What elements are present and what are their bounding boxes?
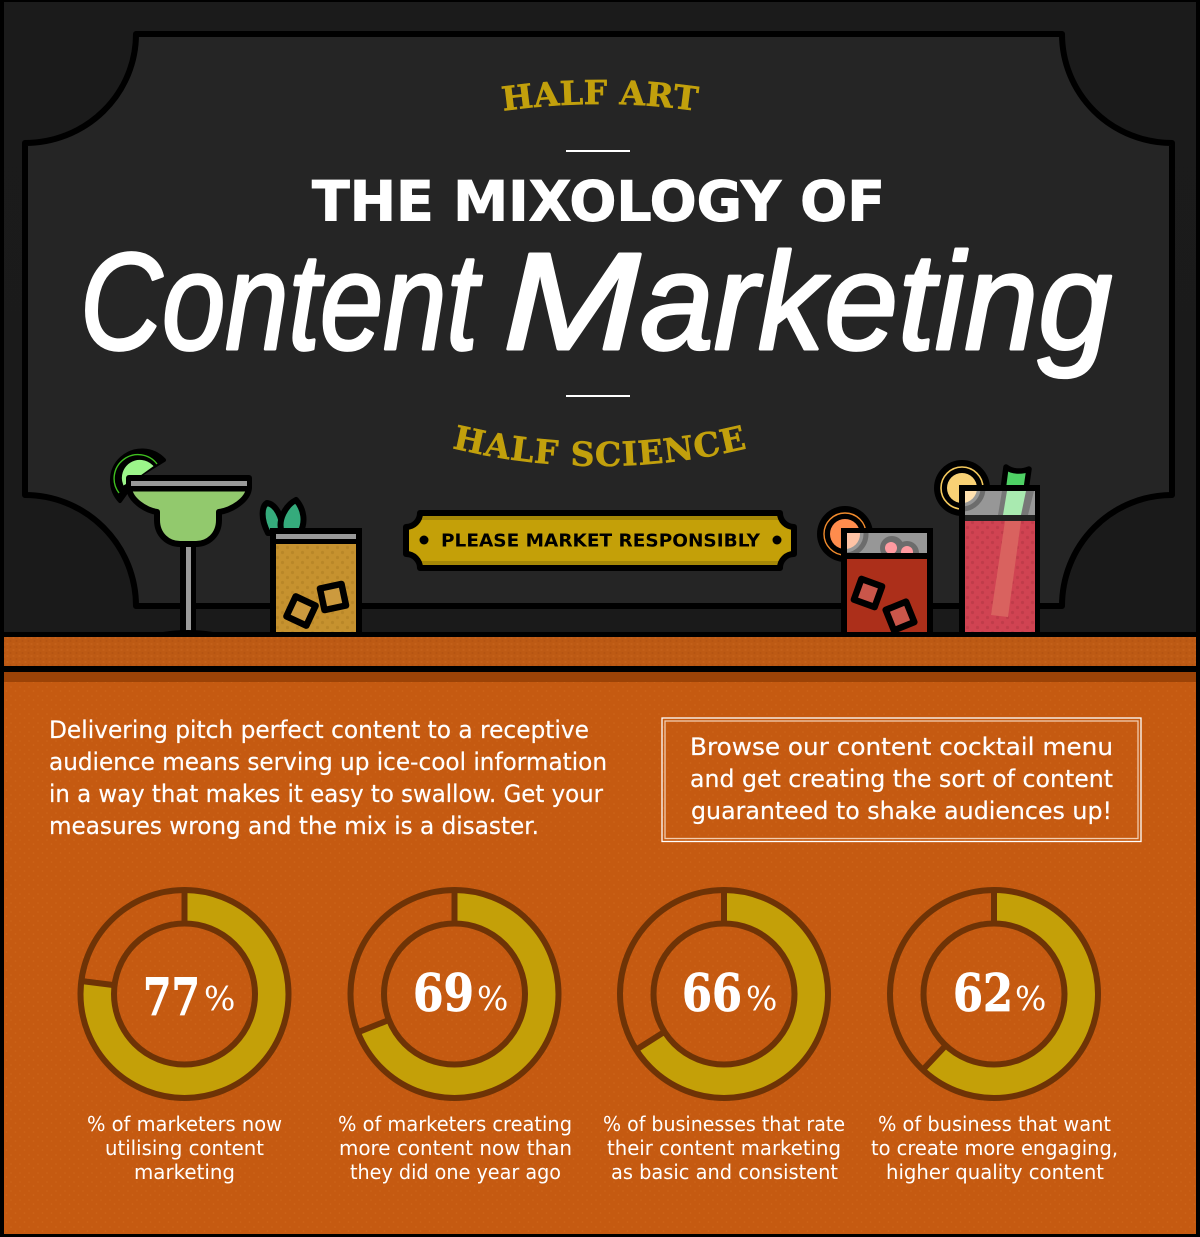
caption [603,1112,845,1184]
callout: cocktail menu: Browse our content cocktail menu [690,733,1113,761]
text block: intro: Delivering pitch perfect content to a receptive [49,716,589,744]
title: content marketing: M [503,225,640,379]
text block: intro: in a way that makes it easy to swallow. Get your [49,780,603,808]
value: 77 [143,968,200,1028]
caption: higher quality content [886,1160,1104,1184]
donut chart: 62% [890,890,1098,1098]
caption: % of marketers now [87,1112,282,1136]
title: content marketing: arketing [640,225,1112,379]
value: % [746,979,777,1018]
header background [4,2,1196,632]
caption: their content marketing [607,1136,841,1160]
callout: cocktail menu [662,718,1141,842]
title: content marketing [80,225,1112,379]
caption: utilising content [105,1136,264,1160]
icon: margarita glass [112,450,249,632]
value: % [204,979,235,1018]
ice cube [320,584,346,610]
plaque: please market responsibly [400,513,800,568]
value: % [1015,979,1046,1018]
caption: to create more engaging, [871,1136,1118,1160]
title: the mixology of: THE MIXOLOGY OF [312,170,885,234]
divider bottom [566,395,630,397]
donut chart: 77% [80,890,288,1098]
value: 66 [682,964,742,1024]
icon: tall red drink with straw [934,460,1040,632]
panel: chalkboard sign [25,34,1172,606]
heading: half art: HALF ART [502,80,700,111]
caption: % of marketers creating [338,1112,572,1136]
ice cube [854,579,882,607]
caption: % of business that want [878,1112,1111,1136]
ice cube [886,602,914,630]
caption: as basic and consistent [611,1160,838,1184]
caption: more content now than [339,1136,572,1160]
orange slice [817,506,873,562]
straw top [1003,467,1029,490]
lemon slice [934,460,990,516]
lime slice [112,450,164,501]
panel: orange section [4,672,1196,1234]
caption: they did one year ago [350,1160,561,1184]
caption: % of businesses that rate [603,1112,845,1136]
donut chart: 69% [350,890,558,1098]
value: 62 [953,964,1013,1024]
callout: cocktail menu: and get creating the sort of content [690,765,1113,793]
icon: red cocktail tumbler [817,506,933,632]
caption [338,1112,572,1184]
mint leaves [263,500,303,533]
callout: cocktail menu: guaranteed to shake audiences up! [691,797,1112,825]
text block: intro: audience means serving up ice-cool information [49,748,607,776]
text block: intro [49,716,607,840]
icon: iced tumbler with mint [263,500,362,632]
caption [87,1112,282,1184]
ice cube [286,596,316,626]
value: % [477,979,508,1018]
text block: intro: measures wrong and the mix is a disaster. [49,812,539,840]
divider top [566,150,630,152]
heading: half science: HALF SCIENCE [453,424,746,467]
caption: marketing [134,1160,235,1184]
bar counter [0,632,1200,672]
title: content marketing: Content [80,225,483,379]
caption [871,1112,1118,1184]
plaque: please market responsibly: PLEASE MARKET RESPONSIBLY [441,530,761,552]
value: 69 [413,964,474,1024]
donut chart: 66% [620,890,828,1098]
